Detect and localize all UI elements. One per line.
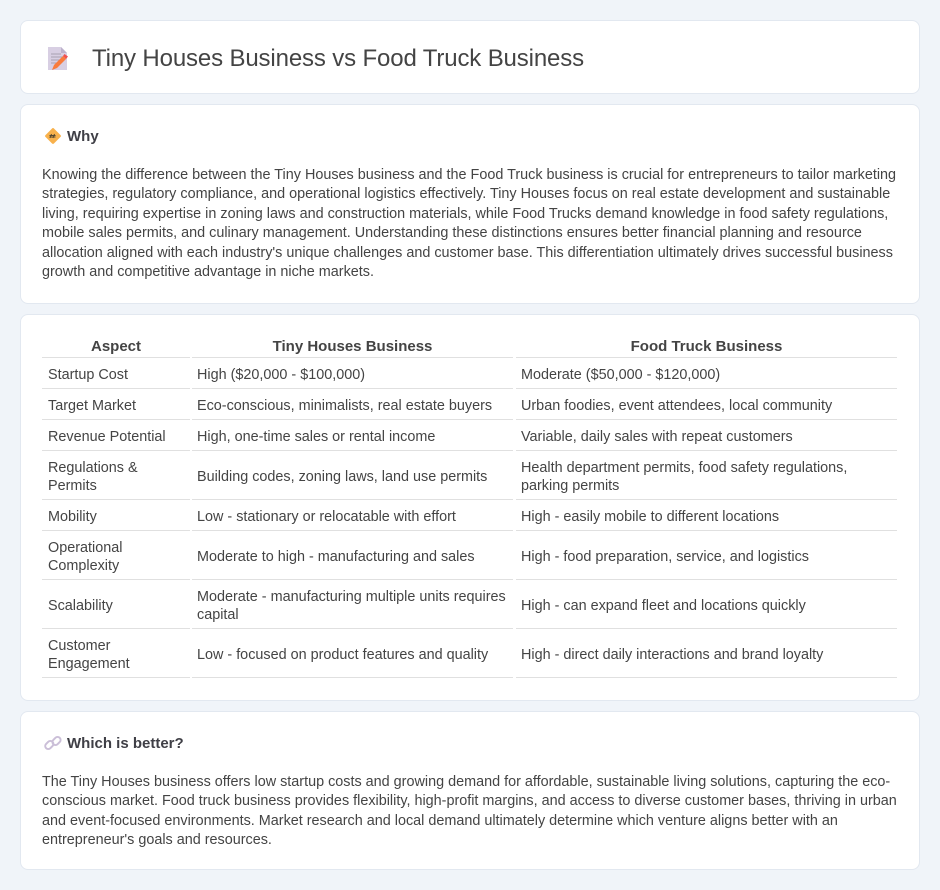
row: operational complexity: Moderate to high - manufacturing and sales (197, 549, 475, 565)
text block: why paragraph: Knowing the difference between the Tiny Houses business and the Food Truck business is crucial for entrepreneurs to tailor marketing (42, 167, 896, 183)
row: mobility (48, 509, 779, 525)
text block: why paragraph: mobile sales permits, and culinary management. Understanding these distinctions ensures better financial planning and resource (42, 225, 862, 241)
row: target market: Target Market (48, 398, 136, 414)
icon: document with pencil (48, 47, 68, 70)
row: operational complexity (48, 540, 809, 574)
text block: why paragraph: strategies, regulatory compliance, and operational logistics effectively. Tiny Houses focus on real estate development and sustainable (42, 186, 890, 202)
text block: why paragraph: living, requiring expertise in zoning laws and construction materials, while Food Trucks demand knowledge in food safety regulations, (42, 206, 888, 222)
row: regulations and permits (48, 460, 847, 494)
table header: food truck business: Food Truck Business (631, 338, 782, 355)
row: regulations and permits: parking permits (521, 478, 619, 494)
row: customer engagement: Low - focused on product features and quality (197, 647, 488, 663)
table header: aspect: Aspect (91, 338, 141, 355)
row: scalability (48, 589, 806, 623)
row: regulations and permits: Permits (48, 478, 97, 494)
panel: which is better (20, 711, 920, 870)
row: regulations and permits: Health department permits, food safety regulations, (521, 460, 847, 476)
row: regulations and permits: Building codes, zoning laws, land use permits (197, 469, 487, 485)
row: customer engagement (48, 638, 824, 672)
text block: which is better paragraph: The Tiny Houses business offers low startup costs and growing demand for affordable, sustainable living solutions, capturing the eco- (42, 774, 890, 790)
row: revenue potential: Variable, daily sales with repeat customers (521, 429, 793, 445)
row: scalability: High - can expand fleet and locations quickly (521, 598, 806, 614)
text block: which is better paragraph: entrepreneur's goals and resources. (42, 832, 272, 848)
row: revenue potential: High, one-time sales or rental income (197, 429, 435, 445)
row: revenue potential: Revenue Potential (48, 429, 166, 445)
title: Tiny Houses Business vs Food Truck Business (92, 45, 584, 72)
icon: warning diamond (45, 128, 61, 144)
text block: which is better paragraph: and event-focused environments. Market research and local demand ultimately determine which venture aligns better with an (42, 813, 838, 829)
row: startup cost: High ($20,000 - $100,000) (197, 367, 365, 383)
row: operational complexity: Operational (48, 540, 122, 556)
text block: which is better paragraph: conscious market. Food truck business provides flexibility, high-profit margins, and access to diverse customer bases, thriving in urban (42, 793, 897, 809)
panel: why (20, 104, 920, 304)
row: customer engagement: Customer (48, 638, 110, 654)
row: scalability: capital (197, 607, 239, 623)
table header: tiny houses business: Tiny Houses Business (273, 338, 432, 355)
row: mobility: Mobility (48, 509, 97, 525)
row: mobility: High - easily mobile to different locations (521, 509, 779, 525)
row: startup cost: Moderate ($50,000 - $120,000) (521, 367, 720, 383)
text block: which is better paragraph (42, 774, 897, 848)
row: mobility: Low - stationary or relocatable with effort (197, 509, 456, 525)
row: scalability: Scalability (48, 598, 113, 614)
panel: header (20, 20, 920, 94)
row: revenue potential (48, 429, 793, 445)
row: customer engagement: High - direct daily interactions and brand loyalty (521, 647, 823, 663)
row: startup cost: Startup Cost (48, 367, 128, 383)
row: startup cost (48, 367, 720, 383)
text block: why paragraph (42, 167, 896, 280)
panel: comparison table (20, 314, 920, 701)
heading: why: Why (67, 128, 99, 145)
row: scalability: Moderate - manufacturing multiple units requires (197, 589, 506, 605)
row: operational complexity: Complexity (48, 558, 119, 574)
text block: why paragraph: allocation aligned with each industry's unique challenges and customer base. This differentiation ultimately drives successful business (42, 245, 893, 261)
row: target market: Eco-conscious, minimalists, real estate buyers (197, 398, 492, 414)
row: target market: Urban foodies, event attendees, local community (521, 398, 832, 414)
row: operational complexity: High - food preparation, service, and logistics (521, 549, 809, 565)
heading: which is better: Which is better? (67, 735, 184, 752)
row: customer engagement: Engagement (48, 656, 130, 672)
row: regulations and permits: Regulations & (48, 460, 138, 476)
row: target market (48, 398, 832, 414)
icon: link (44, 736, 62, 750)
text block: why paragraph: growth and competitive advantage in niche markets. (42, 264, 374, 280)
